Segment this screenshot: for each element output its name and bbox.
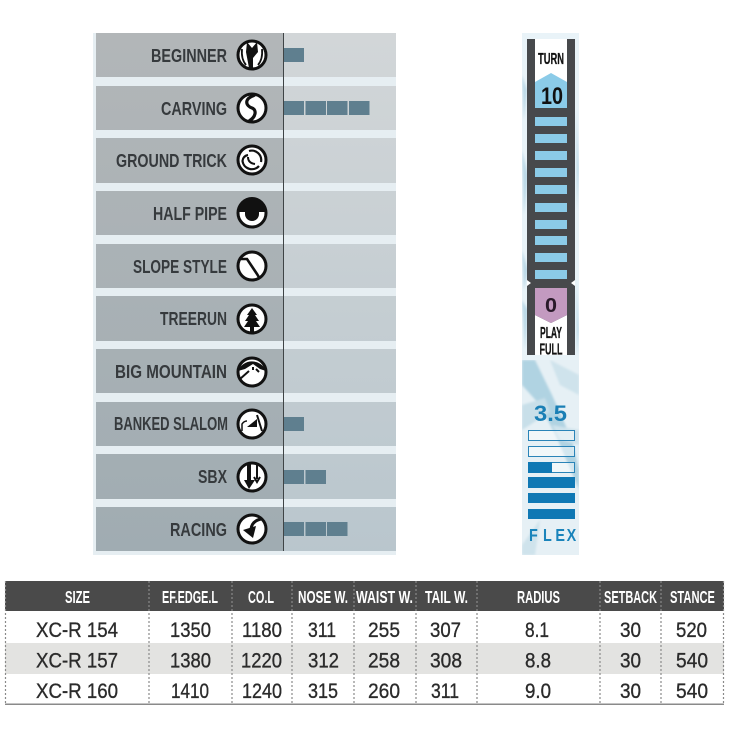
table row: XC-R 160: 30: [620, 679, 641, 703]
row: ground trick: GROUND TRICK: [116, 151, 227, 171]
icon: carving: [238, 94, 266, 122]
table header: CO.L: [248, 587, 274, 607]
table row: XC-R 157: 1220: [241, 648, 282, 672]
panel: turn scale: [522, 33, 579, 360]
table row: XC-R 160: 311: [431, 679, 459, 703]
table header: TAIL W.: [425, 587, 468, 607]
icon: banked slalom: [238, 410, 266, 438]
table header: NOSE W.: [298, 587, 348, 607]
icon: half pipe: [237, 197, 267, 227]
turn minimum badge: 0: [545, 295, 557, 317]
row: beginner: [96, 33, 396, 77]
table row: XC-R 160: 9.0: [525, 679, 551, 703]
row: carving: [96, 86, 396, 130]
table header: [5, 581, 724, 611]
label: play full: FULL: [540, 342, 562, 358]
table row: XC-R 160: 315: [308, 679, 338, 703]
table row: XC-R 154: 311: [308, 618, 336, 642]
table row: XC-R 157: 540: [676, 648, 708, 672]
row: slope style: [96, 244, 396, 288]
flex bars: [528, 430, 575, 519]
row: racing: RACING: [170, 520, 227, 540]
table row: XC-R 154: XC-R 154: [36, 618, 118, 642]
table row: XC-R 160: [5, 674, 724, 704]
row: racing: [96, 507, 396, 551]
row: banked slalom: [96, 402, 396, 446]
table row: XC-R 157: 308: [430, 648, 462, 672]
icon: ground trick: [238, 146, 266, 174]
label: flex: FLEX: [529, 526, 576, 545]
table row: XC-R 157: 258: [368, 648, 400, 672]
panel: flex scale: [522, 360, 579, 555]
row: beginner: BEGINNER: [151, 46, 227, 66]
table row: XC-R 154: 30: [620, 618, 641, 642]
table row: XC-R 154: 8.1: [525, 618, 549, 642]
row: half pipe: HALF PIPE: [153, 204, 227, 224]
table row: XC-R 160: 1410: [171, 679, 209, 703]
icon: sbx: [238, 463, 266, 491]
table row: XC-R 157: 30: [620, 648, 641, 672]
icon: treerun: [238, 305, 266, 333]
row: carving: CARVING: [161, 99, 227, 119]
table row: XC-R 157: 1380: [170, 648, 211, 672]
turn maximum badge: [535, 73, 567, 110]
table row: XC-R 160: XC-R 160: [36, 679, 118, 703]
table header: WAIST W.: [356, 587, 413, 607]
table row: XC-R 157: 8.8: [525, 648, 551, 672]
label: play full: [540, 325, 562, 358]
table row: XC-R 157: 312: [308, 648, 339, 672]
turn maximum badge: 10: [541, 83, 563, 110]
table header: RADIUS: [517, 587, 560, 607]
table row: XC-R 154: [5, 611, 724, 643]
table header: SETBACK: [604, 587, 657, 607]
turn minimum badge: [535, 288, 567, 355]
flex value: 3.5: [534, 401, 567, 426]
row: sbx: [96, 454, 396, 499]
icon: racing: [238, 515, 266, 543]
row: ground trick: [96, 138, 396, 183]
table: size specifications: [5, 581, 724, 705]
table row: XC-R 154: 1180: [242, 618, 282, 642]
row: sbx: SBX: [198, 467, 227, 487]
row: banked slalom: BANKED SLALOM: [114, 414, 228, 434]
row: big mountain: [96, 349, 396, 393]
label: turn: TURN: [538, 51, 564, 68]
row: big mountain: BIG MOUNTAIN: [115, 362, 227, 382]
icon: beginner: [238, 41, 266, 69]
turn ladder bars: [535, 117, 567, 279]
label: play full: PLAY: [540, 325, 562, 342]
table header: SIZE: [65, 587, 90, 607]
row: treerun: TREERUN: [160, 309, 227, 329]
row: slope style: SLOPE STYLE: [133, 257, 227, 277]
row: half pipe: [96, 191, 396, 235]
panel: riding style ratings: [93, 33, 396, 555]
table row: XC-R 154: 520: [676, 618, 707, 642]
table row: XC-R 160: 260: [368, 679, 400, 703]
table row: XC-R 160: 1240: [242, 679, 282, 703]
table header: EF.EDGE.L: [162, 587, 218, 607]
icon: big mountain: [238, 358, 266, 386]
table row: XC-R 154: 307: [430, 618, 461, 642]
row: treerun: [96, 296, 396, 341]
icon: slope style: [238, 252, 266, 280]
table row: XC-R 154: 1350: [170, 618, 211, 642]
table row: XC-R 157: [5, 643, 724, 674]
table row: XC-R 160: 540: [676, 679, 708, 703]
table row: XC-R 157: XC-R 157: [36, 648, 118, 672]
table row: XC-R 154: 255: [368, 618, 400, 642]
